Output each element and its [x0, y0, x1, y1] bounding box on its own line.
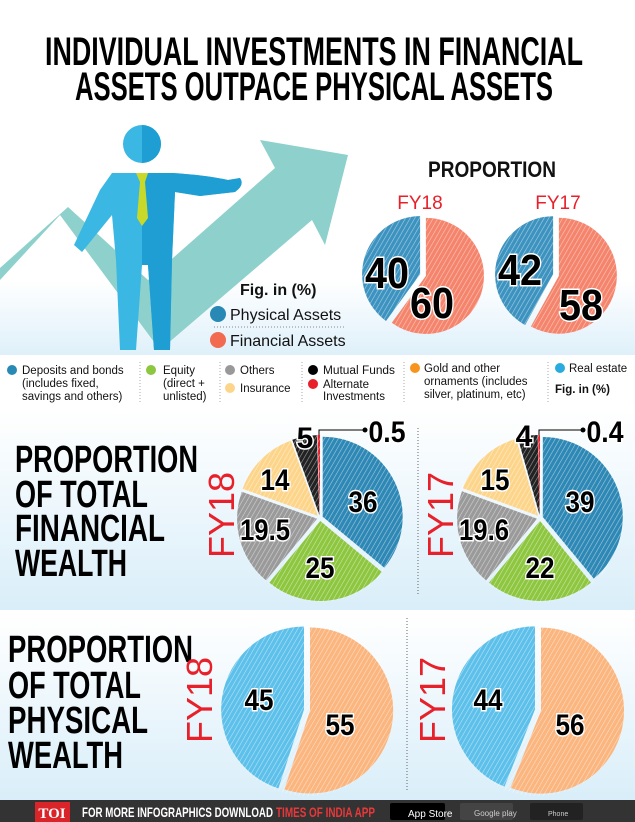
legend: categories: Investments — [323, 391, 385, 403]
pie: physical FY18: 45 — [244, 684, 274, 717]
pie: top FY17 — [495, 193, 617, 334]
heading: physical wealth: PROPORTION — [8, 629, 193, 671]
footer: FOR MORE INFOGRAPHICS DOWNLOAD — [82, 804, 273, 820]
footer: Google play — [474, 809, 517, 818]
pie: financial FY17: 39 — [566, 486, 594, 519]
heading: financial wealth: OF TOTAL — [15, 474, 148, 516]
pie: physical FY17: 44 — [474, 684, 503, 717]
title — [45, 30, 583, 109]
pie: top FY18: FY18 — [397, 193, 443, 214]
legend: top: Financial Assets — [230, 333, 346, 350]
pie: financial FY18: 25 — [306, 552, 334, 585]
heading: financial wealth: FINANCIAL — [15, 508, 165, 550]
footer: App Store — [408, 809, 453, 820]
legend: categories: savings and others) — [22, 391, 123, 403]
icon: rising arrow — [0, 140, 348, 350]
heading: physical wealth — [8, 629, 193, 777]
pie: financial FY17: 19.6 — [459, 514, 509, 547]
legend: categories: (includes fixed, — [22, 378, 99, 390]
pie: financial FY18: 36 — [348, 486, 378, 519]
pie: physical FY18: FY18 — [179, 657, 220, 743]
heading: financial wealth: WEALTH — [15, 543, 127, 585]
legend: categories: Insurance — [240, 383, 291, 395]
legend: categories: silver, platinum, etc) — [424, 389, 526, 401]
pie: physical FY17: 56 — [556, 709, 584, 742]
pie: top FY18: 40 — [365, 249, 409, 298]
heading: proportion: PROPORTION — [428, 157, 556, 182]
pie: financial FY17: 0.4 — [586, 416, 624, 449]
heading: physical wealth: OF TOTAL — [8, 665, 141, 707]
legend: top: Fig. in (%) — [240, 282, 316, 299]
pie: top FY18: 60 — [410, 279, 454, 328]
footer: TIMES OF INDIA APP — [276, 804, 375, 820]
heading: physical wealth: WEALTH — [8, 735, 123, 777]
pie: physical FY18: 55 — [326, 709, 354, 742]
pie: financial FY18: 5 — [297, 422, 313, 455]
pie: financial FY17: 4 — [516, 420, 533, 453]
legend: top: Physical Assets — [230, 307, 341, 324]
legend: categories: Real estate — [569, 363, 627, 375]
pie: top FY17: FY17 — [535, 193, 581, 214]
footer — [0, 800, 635, 822]
pie: financial FY17 — [420, 416, 624, 602]
pie: physical FY17 — [412, 624, 624, 796]
legend: top — [210, 282, 346, 350]
footer: TOI — [38, 806, 66, 822]
pie: financial FY17: FY17 — [420, 472, 461, 558]
legend: categories: Deposits and bonds — [22, 365, 124, 377]
footer: Phone — [548, 811, 568, 818]
pie: physical FY17: FY17 — [412, 657, 453, 743]
pie: physical FY18 — [179, 624, 393, 796]
heading: financial wealth — [15, 439, 198, 585]
heading: financial wealth: PROPORTION — [15, 439, 198, 481]
legend: categories: Fig. in (%) — [555, 384, 610, 396]
legend: categories: Mutual Funds — [323, 365, 395, 377]
pie: financial FY18: 19.5 — [240, 514, 290, 547]
pie: financial FY18 — [201, 416, 406, 602]
pie: financial FY17: 15 — [480, 464, 510, 497]
legend: categories: (direct + — [163, 378, 205, 390]
legend: categories — [7, 362, 627, 404]
legend: categories: ornaments (includes — [424, 376, 528, 388]
icon: businessman — [74, 125, 242, 350]
pie: top FY17: 42 — [498, 246, 542, 295]
pie: financial FY18: FY18 — [201, 472, 242, 558]
legend: categories: Equity — [163, 365, 195, 377]
pie: top FY17: 58 — [559, 281, 603, 330]
pie: financial FY18: 0.5 — [368, 416, 406, 449]
legend: categories: Others — [240, 365, 275, 377]
legend: categories: Alternate — [323, 379, 369, 391]
pie: financial FY17: 22 — [526, 552, 554, 585]
legend: categories: unlisted) — [163, 391, 207, 403]
pie: top FY18 — [362, 193, 484, 334]
heading: physical wealth: PHYSICAL — [8, 700, 148, 742]
pie: financial FY18: 14 — [260, 464, 290, 497]
legend: categories: Gold and other — [424, 363, 500, 375]
